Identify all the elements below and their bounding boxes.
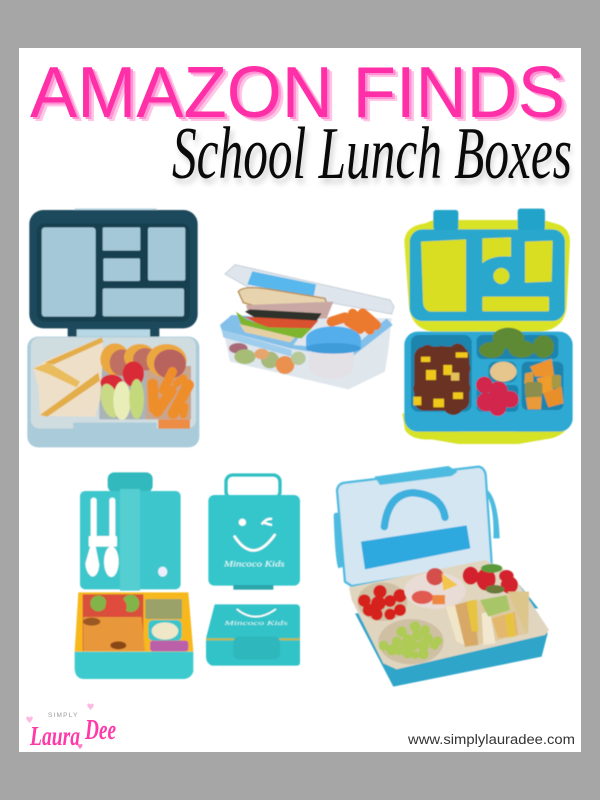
- logo script name: Laura: Laura: [29, 721, 80, 751]
- title: Amazon Finds: AMAZON FINDS: [32, 55, 568, 135]
- cucumber garnish: [90, 595, 139, 617]
- closed box side view: [206, 604, 300, 666]
- base tray: [27, 337, 199, 447]
- beige tray: [349, 560, 549, 669]
- broccoli: [479, 328, 554, 358]
- blue base: [355, 583, 548, 687]
- grapes: [378, 619, 444, 664]
- tomatoes: [357, 582, 407, 621]
- lid: [404, 220, 570, 332]
- logo hearts: [25, 703, 95, 751]
- toast: [83, 617, 145, 651]
- blue lidded pot: [306, 326, 361, 379]
- title: Amazon Finds: AMAZON FINDS: [30, 53, 565, 133]
- product: clear box with sandwich: [220, 265, 394, 389]
- brand lettering: Mincoco Kids: [223, 620, 288, 627]
- closed lid front view: [208, 475, 300, 590]
- salami slices: [100, 343, 187, 379]
- fruit salad: [404, 568, 466, 609]
- title: Amazon Finds: AMAZON FINDS: [35, 57, 570, 137]
- sandwich: [236, 288, 333, 342]
- carrots: [153, 372, 188, 415]
- website address: www.simplylauradee.com: [407, 732, 575, 747]
- logo hearts: ♥: [77, 743, 83, 751]
- logo hearts: ♥: [25, 716, 34, 726]
- raspberries: [476, 377, 519, 416]
- product: blue box with beige compartments: [334, 466, 549, 687]
- brand lettering: Mincoco Kids: [223, 559, 285, 569]
- logo small label: SIMPLY: [48, 712, 79, 719]
- sandwiches: [445, 592, 529, 647]
- product: yellow and blue bento box: [402, 209, 573, 444]
- lid: [29, 210, 198, 328]
- yellow food tray: [75, 592, 193, 679]
- open lid with cutlery: [80, 489, 181, 591]
- carrots: [332, 313, 376, 330]
- product: turquoise open lunch box: [75, 472, 300, 679]
- cashews: [490, 362, 517, 382]
- open clear lid: [225, 265, 394, 314]
- logo script name: Dee: Dee: [84, 714, 116, 746]
- strawberries: [463, 564, 518, 594]
- base: [402, 332, 573, 444]
- logo hearts: ♥: [86, 703, 95, 713]
- fruit: [229, 343, 306, 374]
- clear lid with handle: [334, 466, 500, 586]
- base container: [220, 315, 392, 389]
- meatballs: [413, 344, 470, 415]
- sandwich: [33, 337, 103, 417]
- product: dark teal bento box: [27, 208, 199, 447]
- apple and strawberries: [97, 361, 144, 420]
- sweet potato and vegetables: [524, 359, 563, 409]
- logo: Simply Laura Dee: [25, 703, 116, 751]
